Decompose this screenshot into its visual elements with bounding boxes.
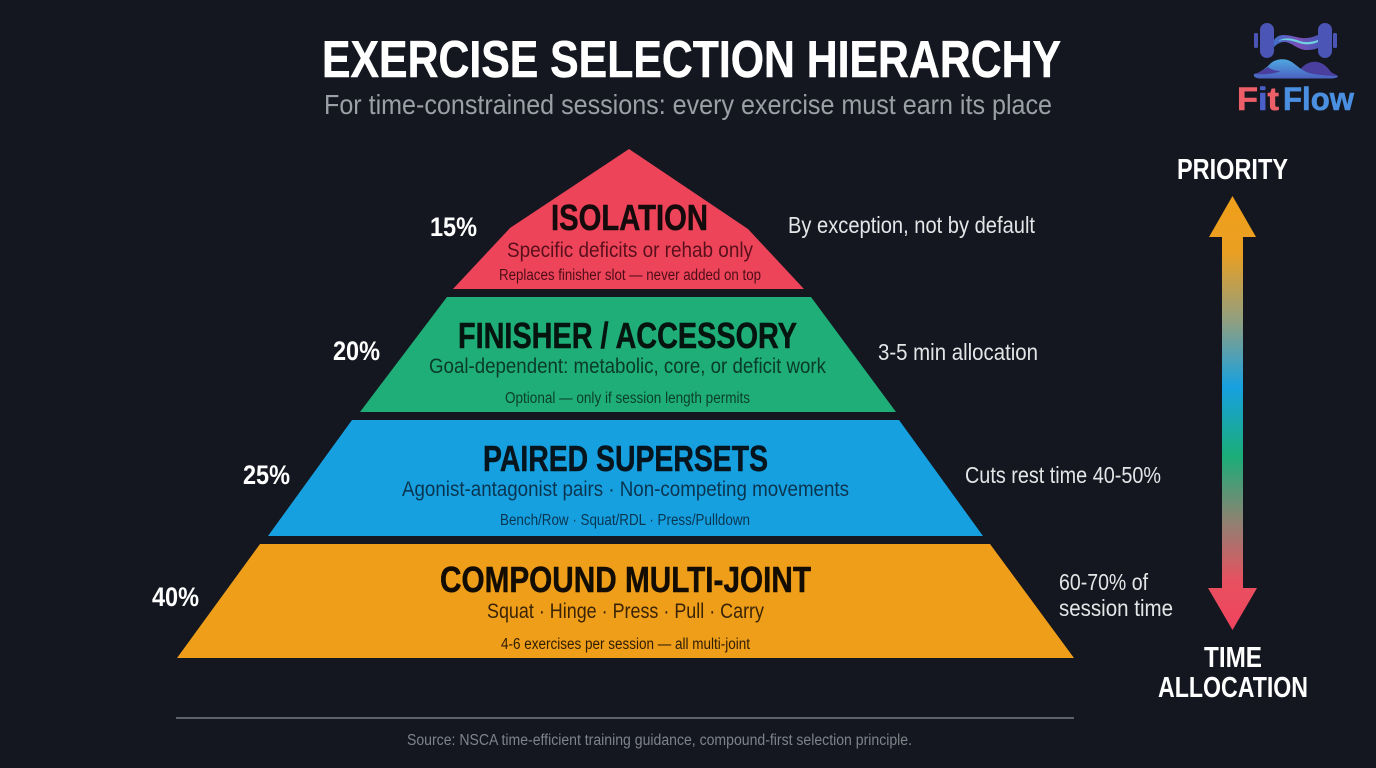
annotation: isolation: By exception, not by default [788, 212, 1036, 238]
panel: isolation tier [453, 149, 804, 289]
logo wordmark [1237, 81, 1354, 117]
percent label: 40%: 40% [152, 582, 199, 612]
panel: finisher / accessory tier: FINISHER / ACCESSORY [458, 315, 797, 356]
panel: compound multi-joint tier: 4-6 exercises per session — all multi-joint [501, 636, 751, 653]
panel: paired supersets tier: Bench/Row · Squat/RDL · Press/Pulldown [500, 512, 750, 529]
percent label: 15%: 15% [430, 212, 477, 242]
percent label: 25%: 25% [243, 460, 290, 490]
icon: dumbbell with wave [1254, 23, 1338, 78]
panel: isolation tier: Replaces finisher slot — never added on top [499, 267, 761, 284]
subtitle: For time-constrained sessions: every exercise must earn its place [324, 89, 1052, 120]
label: time allocation: TIME [1204, 642, 1262, 674]
annotation: compound: session time [1059, 595, 1173, 621]
panel: isolation tier: ISOLATION [551, 197, 708, 238]
pyramid [177, 149, 1074, 658]
panel: isolation tier: Specific deficits or rehab only [507, 239, 753, 262]
panel: paired supersets tier [268, 420, 983, 536]
label: time allocation: ALLOCATION [1158, 672, 1308, 704]
annotation: finisher: 3-5 min allocation [878, 339, 1038, 365]
annotation: compound: 60-70% of [1059, 569, 1149, 595]
logo wordmark: Flow [1283, 81, 1354, 117]
logo: FitFlow [1237, 23, 1354, 117]
arrow: priority to time allocation [1208, 196, 1257, 630]
panel: finisher / accessory tier: Goal-dependent: metabolic, core, or deficit work [429, 355, 826, 378]
panel: paired supersets tier: PAIRED SUPERSETS [483, 438, 768, 479]
panel: compound multi-joint tier: COMPOUND MULTI-JOINT [440, 559, 811, 600]
logo wordmark: Fit [1237, 81, 1279, 117]
label: priority: PRIORITY [1177, 154, 1288, 186]
annotation: compound [1059, 569, 1173, 621]
panel: compound multi-joint tier [177, 544, 1074, 658]
source note: Source: NSCA time-efficient training guidance, compound-first selection principle. [407, 732, 912, 749]
annotation: supersets: Cuts rest time 40-50% [965, 462, 1161, 488]
title: EXERCISE SELECTION HIERARCHY [322, 31, 1061, 89]
panel: finisher / accessory tier: Optional — only if session length permits [505, 390, 750, 407]
footer divider [176, 717, 1074, 719]
panel: finisher / accessory tier [360, 297, 896, 412]
panel: compound multi-joint tier: Squat · Hinge · Press · Pull · Carry [487, 600, 764, 623]
percent label: 20%: 20% [333, 336, 380, 366]
label: time allocation [1158, 642, 1308, 704]
panel: paired supersets tier: Agonist-antagonist pairs · Non-competing movements [402, 478, 849, 501]
